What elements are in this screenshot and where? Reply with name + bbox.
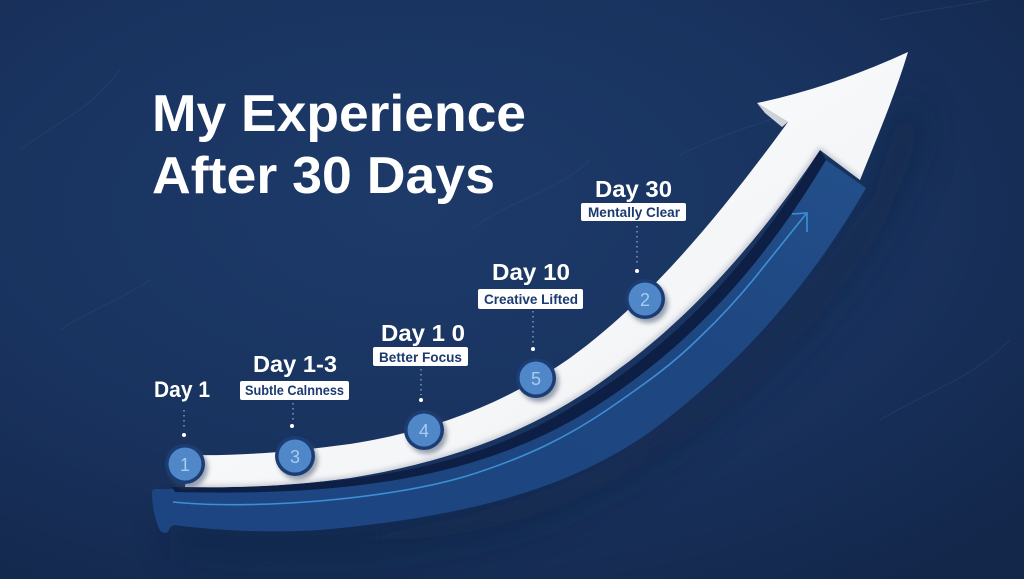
band shape (152, 158, 866, 533)
arrow lower edge shading (185, 151, 860, 488)
label: Day 1-3 Subtle Calnness: Subtle Calnness (245, 383, 344, 398)
marker 5 (516, 358, 559, 402)
label: Day 30 Mentally Clear (581, 176, 686, 273)
title: After 30 Days (152, 147, 495, 205)
label: Day 1-3 Subtle Calnness (240, 351, 349, 428)
marker 1 (165, 444, 208, 488)
dark gap under white arrow (172, 150, 826, 493)
label: Day 1-3 Subtle Calnness: Day 1-3 (253, 351, 337, 377)
marker 4: 4 (419, 421, 429, 441)
arrow body (185, 52, 908, 487)
marker 1: 1 (180, 455, 190, 475)
inner line (173, 214, 806, 505)
label: Day 30 Mentally Clear: Day 30 (595, 176, 672, 202)
marker 5: 5 (531, 369, 541, 389)
title: My Experience (152, 85, 526, 143)
marker 2 (625, 279, 668, 323)
label: Day 1 0 Better Focus: Better Focus (379, 350, 462, 365)
marker 3: 3 (290, 447, 300, 467)
blue lower band with inner arrow line (152, 150, 866, 533)
label: Day 1 0 Better Focus (373, 320, 468, 402)
label: Day 10 Creative Lifted: Creative Lifted (484, 292, 578, 307)
marker 2: 2 (640, 290, 650, 310)
white rising arrow (185, 52, 908, 488)
label: Day 1 (154, 377, 210, 437)
marker 4 (404, 410, 447, 454)
label: Day 10 Creative Lifted: Day 10 (492, 259, 570, 285)
label: Day 30 Mentally Clear: Mentally Clear (588, 205, 681, 220)
arrow and band drop shadow (170, 90, 925, 555)
arrow side bevel (757, 103, 788, 127)
label: Day 1: Day 1 (154, 377, 210, 402)
title (152, 85, 526, 205)
label: Day 1 0 Better Focus: Day 1 0 (381, 320, 465, 346)
inner arrowhead (792, 213, 807, 232)
marker 3 (275, 436, 318, 480)
label: Day 10 Creative Lifted (478, 259, 583, 351)
